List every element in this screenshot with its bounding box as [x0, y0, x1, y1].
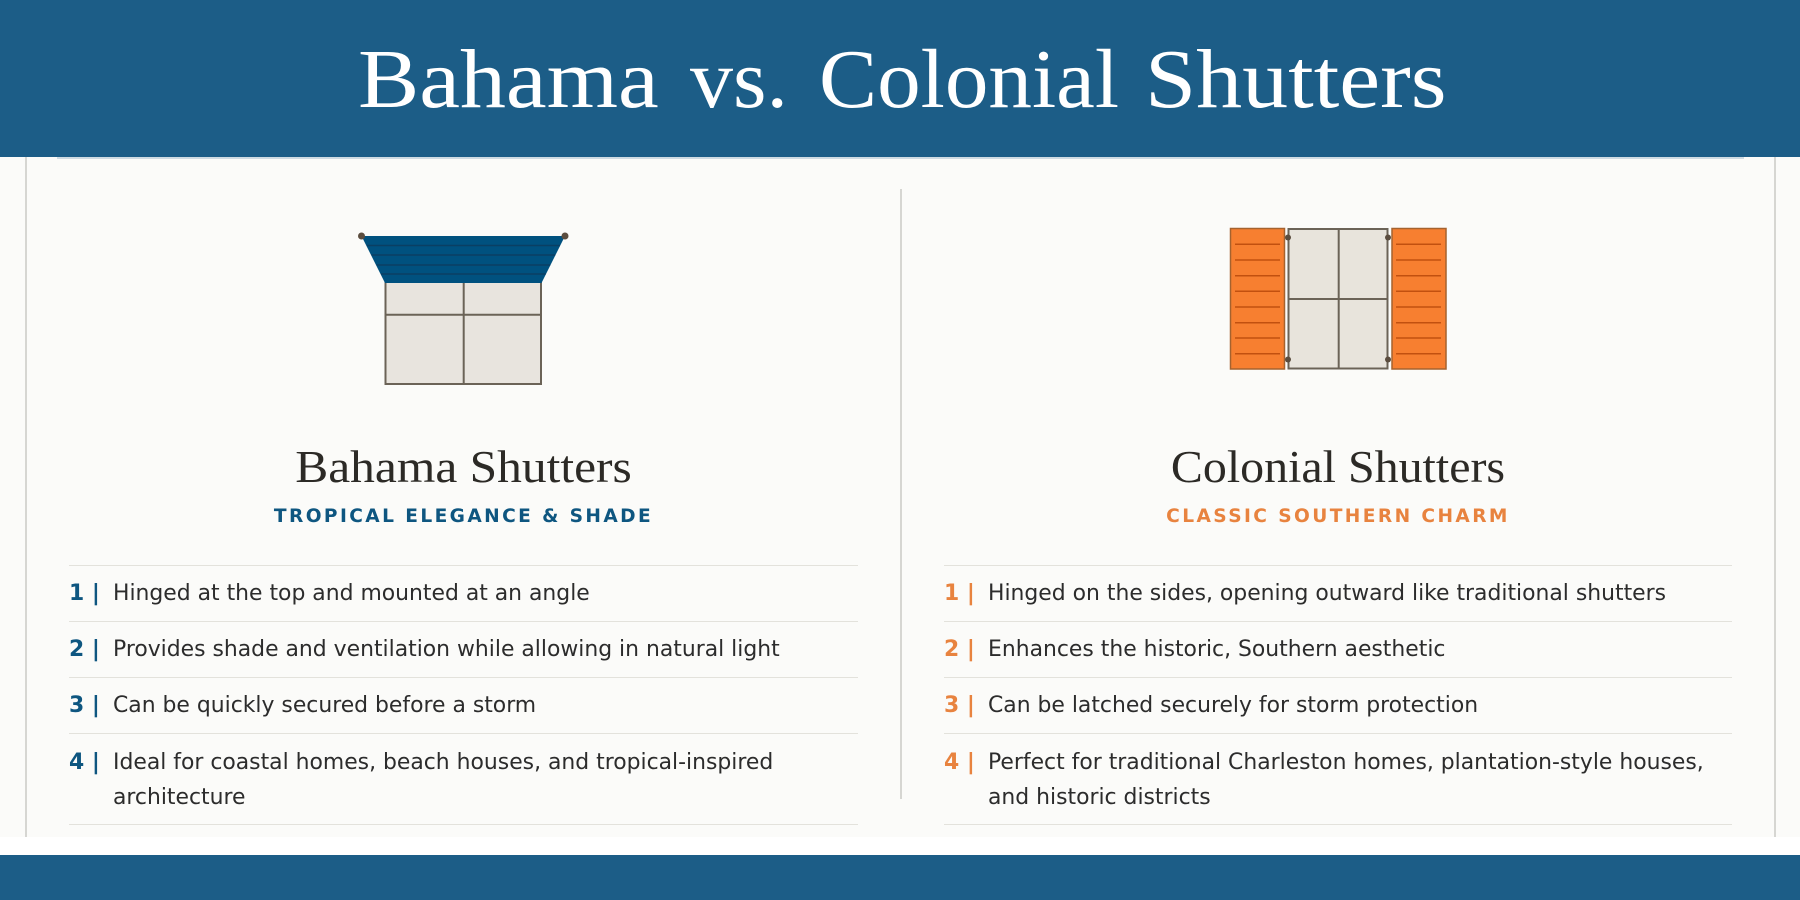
title: Colonial [818, 32, 1119, 126]
list item 3: Can be quickly secured before a storm [113, 692, 536, 718]
list: Bahama features [69, 565, 858, 825]
list item 4: and historic districts [988, 784, 1211, 810]
list item 2: 2 | [69, 636, 100, 662]
right border [1774, 157, 1776, 837]
subheading: CLASSIC SOUTHERN CHARM [1166, 506, 1510, 527]
list item 4 [944, 750, 1704, 810]
list item 3: 3 | [944, 692, 975, 718]
list item 3: Can be latched securely for storm protection [988, 692, 1478, 718]
list item 2: Provides shade and ventilation while allowing in natural light [113, 636, 780, 662]
list item 4: 4 | [69, 750, 100, 774]
list item 4: Ideal for coastal homes, beach houses, and tropical-inspired [113, 750, 773, 774]
list item 3: 3 | [69, 692, 100, 718]
panel: Bahama shutters [69, 232, 858, 825]
list item 4: Perfect for traditional Charleston homes, plantation-style houses, [988, 750, 1704, 774]
heading: Colonial Shutters [1171, 442, 1505, 492]
center divider [900, 189, 902, 799]
list item 1: Hinged at the top and mounted at an angle [113, 580, 590, 606]
list item 1: Hinged on the sides, opening outward like traditional shutters [988, 580, 1666, 606]
list item 2: Enhances the historic, Southern aesthetic [988, 636, 1445, 662]
list item 4: architecture [113, 784, 245, 810]
list item 2: 2 | [944, 636, 975, 662]
list item 4 [69, 750, 773, 810]
page background panel [0, 157, 1800, 837]
icon: Bahama shutter [358, 232, 568, 385]
heading: Bahama Shutters [295, 442, 632, 492]
panel: Colonial shutters [944, 228, 1732, 825]
list item 1: 1 | [69, 580, 100, 606]
left border [25, 157, 27, 837]
title: Shutters [1144, 32, 1446, 126]
list: Colonial features [944, 565, 1732, 825]
icon: Colonial shutter [1230, 228, 1447, 370]
list item 4: 4 | [944, 750, 975, 774]
header band [0, 0, 1800, 157]
title: vs. [690, 32, 788, 126]
list item 1: 1 | [944, 580, 975, 606]
subheading: TROPICAL ELEGANCE & SHADE [274, 506, 653, 527]
footer band [0, 855, 1800, 900]
title [358, 32, 1446, 126]
title: Bahama [358, 32, 659, 126]
header rule [57, 157, 1744, 159]
